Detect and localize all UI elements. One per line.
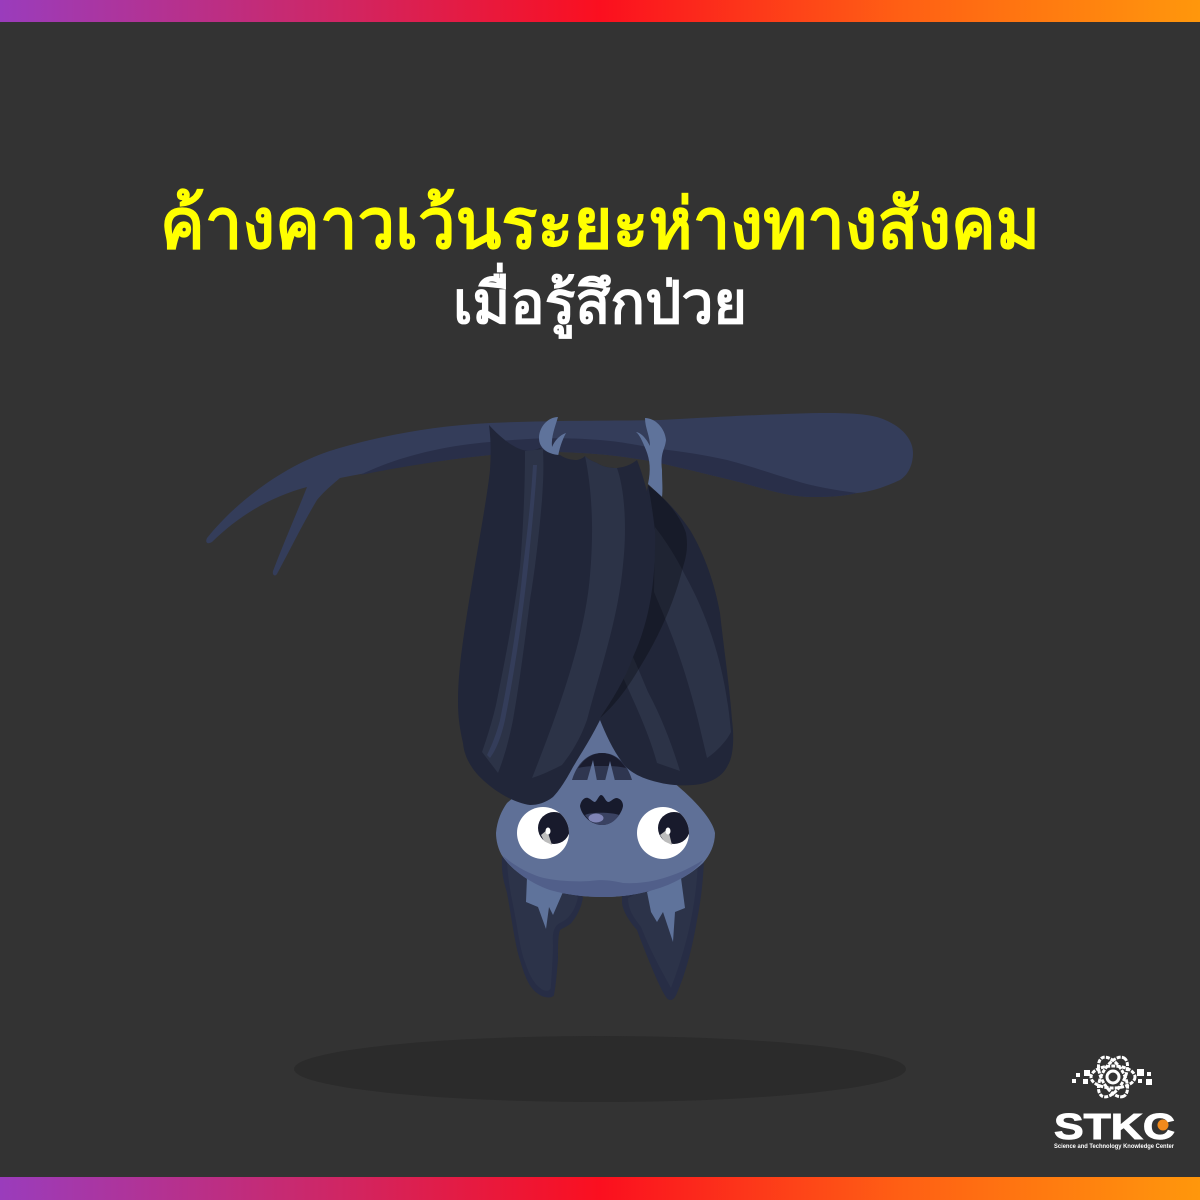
right claw hair — [647, 878, 685, 942]
nose — [572, 753, 632, 781]
right foot — [636, 418, 666, 497]
branch — [206, 413, 913, 575]
ground shadow — [294, 1036, 906, 1102]
right eye — [637, 807, 690, 859]
left eye — [517, 807, 570, 859]
title: ค้างคาวเว้นระยะห่างทางสังคม — [160, 185, 1040, 263]
left foot — [539, 417, 566, 457]
right wing band — [654, 527, 731, 758]
subtitle: เมื่อรู้สึกป่วย — [453, 262, 747, 339]
left wing wide stripe — [532, 456, 625, 778]
right wing — [600, 485, 733, 785]
logo wordmark: STKC — [1054, 1106, 1175, 1147]
logo orange dot — [1158, 1120, 1168, 1130]
dark fold overlay — [600, 485, 687, 718]
logo pixel squares — [1072, 1069, 1152, 1085]
logo: STKC — [1054, 1052, 1175, 1150]
mouth — [580, 795, 623, 825]
top gradient bar — [0, 0, 1200, 22]
right wing narrow band — [622, 657, 680, 771]
left wing — [458, 425, 687, 805]
logo atom icon — [1091, 1052, 1135, 1102]
left wing inner line — [487, 465, 537, 758]
bottom gradient bar — [0, 1177, 1200, 1200]
chin shadow — [503, 856, 703, 897]
left rear wing — [502, 857, 583, 997]
left wing narrow stripe — [482, 449, 543, 773]
logo tagline: Science and Technology Knowledge Center — [1054, 1144, 1175, 1150]
head — [496, 718, 715, 897]
illustration: hanging bat on branch — [206, 413, 913, 1000]
right rear wing — [622, 860, 704, 1000]
left claw hair — [526, 877, 563, 929]
